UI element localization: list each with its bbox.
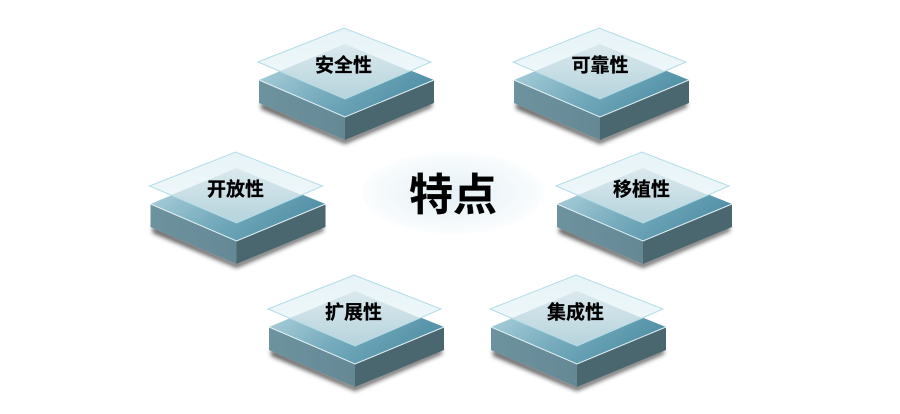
block: 开放性: 开放性 [207,178,264,200]
block: 安全性: 安全性 [315,54,372,76]
block: 扩展性: 扩展性 [325,302,382,324]
block: 扩展性 [268,275,444,391]
block: 集成性: 集成性 [547,300,604,324]
block: 集成性 [490,275,666,391]
block: 可靠性 [513,28,689,144]
block: 移植性 [556,152,732,268]
center ellipse: 特点: 特点 [409,171,497,220]
block: 可靠性: 可靠性 [571,54,629,76]
block: 安全性 [258,28,434,144]
block: 移植性: 移植性 [613,178,670,200]
center ellipse: 特点 [362,152,544,234]
block: 开放性 [150,152,326,268]
